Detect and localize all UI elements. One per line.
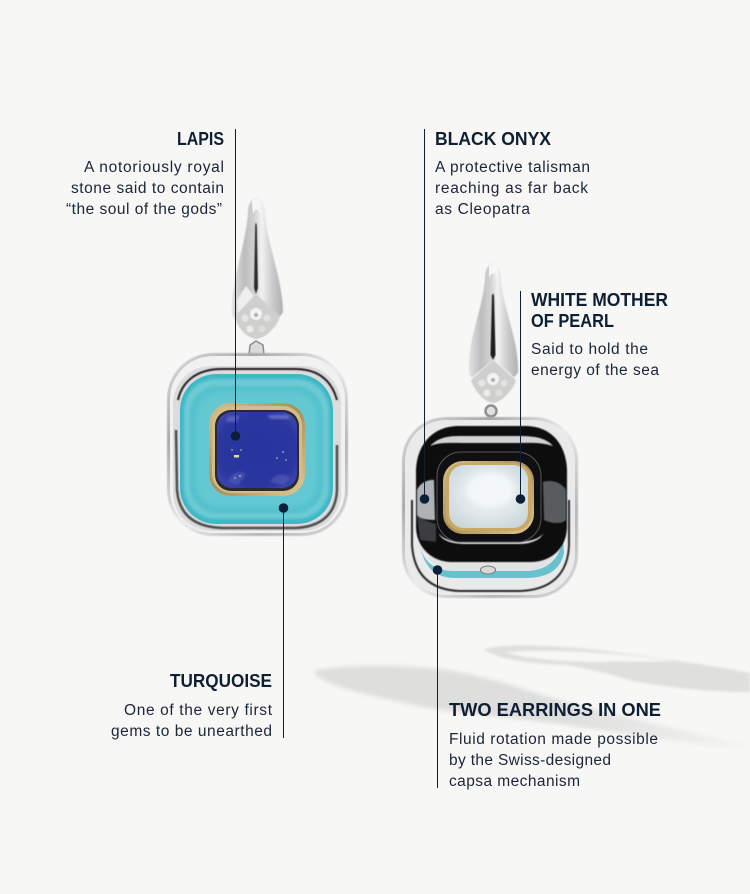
- label: black onyx: A protective talisman: [435, 159, 590, 176]
- label: turquoise: TURQUOISE: [170, 671, 272, 691]
- label: black onyx: as Cleopatra: [435, 201, 530, 218]
- label: white mother of pearl: WHITE MOTHER: [531, 290, 668, 310]
- silver frame: [402, 417, 578, 598]
- rotation hinge: [480, 566, 496, 574]
- label: lapis: A notoriously royal: [84, 159, 224, 176]
- left earring: lapis and turquoise: [167, 198, 348, 536]
- label: white mother of pearl: Said to hold the: [531, 341, 648, 358]
- callout leader lines and dots: [231, 129, 525, 788]
- turquoise inlay: [180, 374, 333, 524]
- inner dark setting: [437, 452, 541, 542]
- label: turquoise: gems to be unearthed: [111, 723, 272, 740]
- gold bezel: [209, 403, 305, 496]
- label: lapis: stone said to contain: [71, 180, 224, 197]
- onyx face: [416, 426, 567, 562]
- connecting loop: [249, 341, 264, 355]
- right earring: black onyx and mother of pearl: [402, 264, 578, 598]
- label: black onyx: [435, 129, 590, 218]
- lapis stone: [217, 412, 297, 488]
- earring hook: [232, 198, 283, 318]
- shadow of earrings on the ground: [313, 645, 750, 750]
- label: two earrings in one: by the Swiss-designed: [449, 752, 611, 769]
- label: lapis: [66, 129, 224, 218]
- label: two earrings in one: [449, 700, 661, 790]
- mother of pearl stone: [449, 465, 528, 528]
- silver strip above turquoise: [428, 556, 555, 571]
- earring hook: [469, 264, 518, 377]
- label: two earrings in one: capsa mechanism: [449, 773, 580, 790]
- label: white mother of pearl: OF PEARL: [531, 311, 614, 331]
- silver frame: [167, 353, 348, 536]
- pave diamond: [235, 294, 280, 339]
- label: lapis: “the soul of the gods”: [66, 201, 222, 218]
- label: two earrings in one: Fluid rotation made possible: [449, 731, 658, 748]
- onyx reflections: [417, 436, 566, 544]
- pave diamond: [471, 360, 516, 403]
- label: black onyx: BLACK ONYX: [435, 129, 551, 149]
- label: white mother of pearl: [531, 290, 668, 379]
- connecting loop: [486, 406, 496, 416]
- label: two earrings in one: TWO EARRINGS IN ONE: [449, 700, 661, 720]
- turquoise strip: [420, 540, 564, 578]
- label: lapis: LAPIS: [177, 129, 224, 149]
- label: white mother of pearl: energy of the sea: [531, 362, 659, 379]
- label: turquoise: [111, 671, 273, 740]
- gold bezel: [443, 461, 534, 534]
- frame dark reflections: [176, 369, 337, 528]
- label: black onyx: reaching as far back: [435, 180, 588, 197]
- label: turquoise: One of the very first: [124, 702, 273, 719]
